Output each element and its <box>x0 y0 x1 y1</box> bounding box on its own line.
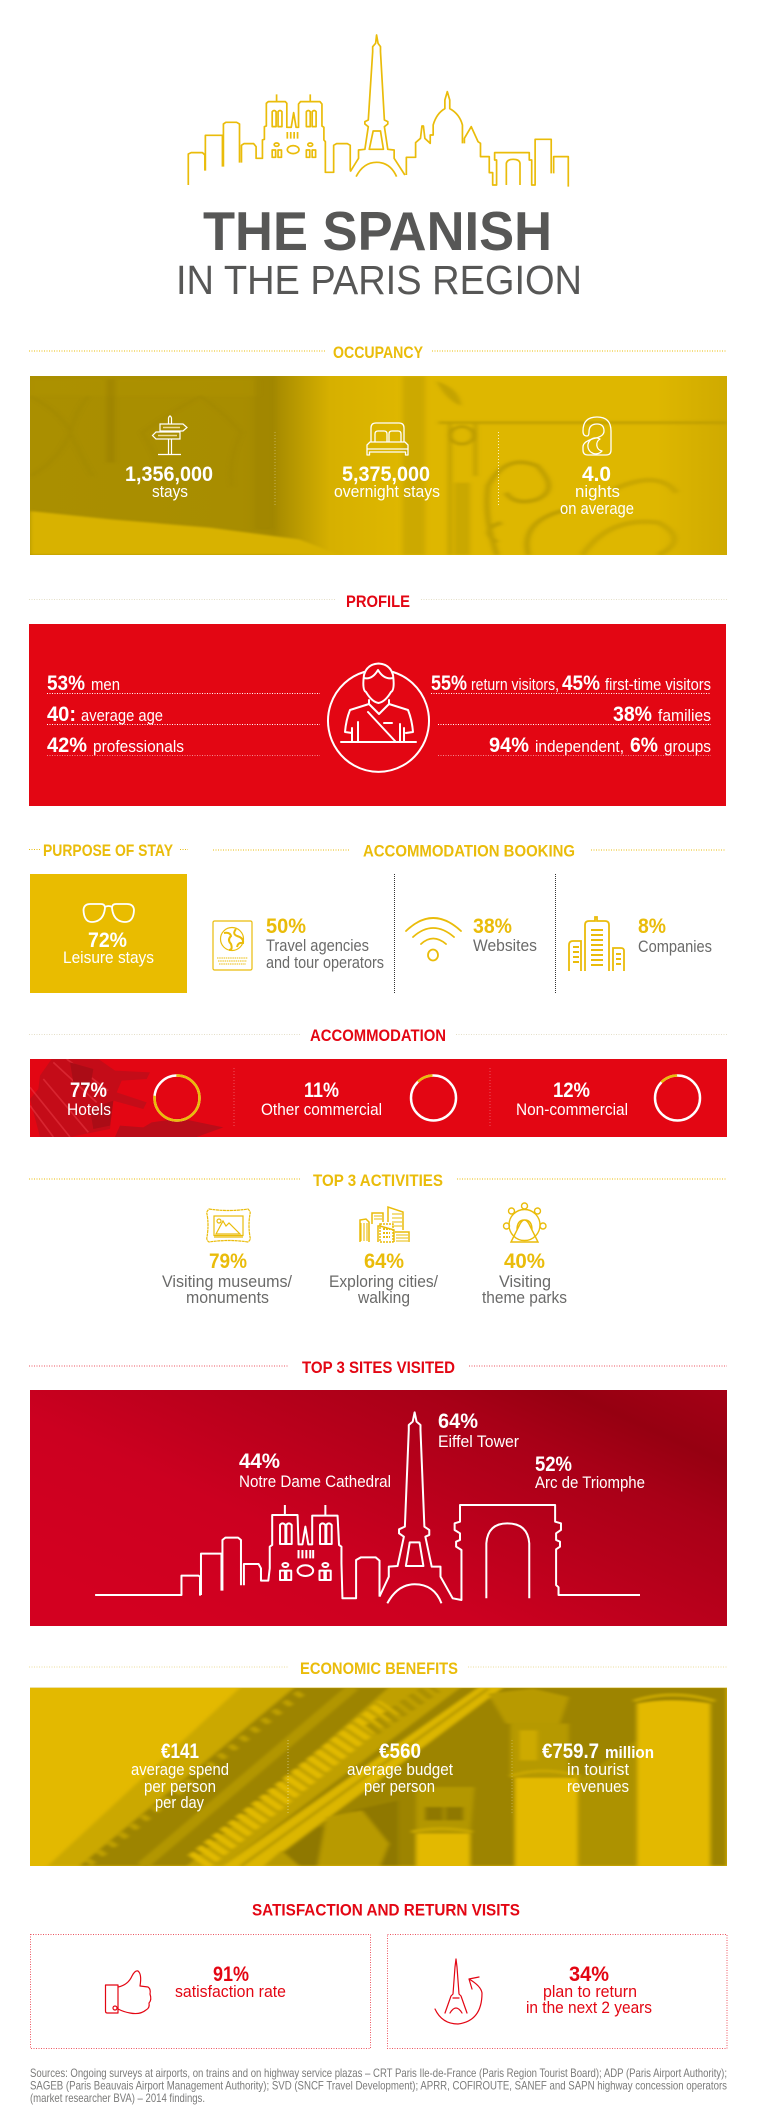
icon: framed picture <box>207 1209 250 1242</box>
stat: average spend: average spend <box>131 1760 229 1779</box>
profile stats right: 45% <box>562 672 600 695</box>
profile stats right: first-time visitors <box>605 675 711 694</box>
profile stats left: professionals <box>93 737 184 756</box>
title: IN THE PARIS REGION <box>176 257 582 303</box>
label: Notre Dame Cathedral <box>239 1450 391 1491</box>
stat: average spend: €141 <box>161 1740 199 1763</box>
stat: nights on average: nights <box>575 482 620 501</box>
profile stats right: 38% <box>613 703 652 726</box>
stat: return visits: plan to return <box>543 1982 637 2001</box>
accommodation background map <box>30 1059 223 1137</box>
activity: exploring cities: 64% <box>364 1250 404 1273</box>
stat: satisfaction rate: satisfaction rate <box>175 1982 286 2001</box>
stat: average budget: average budget <box>347 1760 453 1779</box>
label: Arc de Triomphe: 52% <box>535 1453 572 1476</box>
stat: average spend: per day <box>155 1793 204 1812</box>
heading: economic benefits: ECONOMIC BENEFITS <box>300 1659 458 1678</box>
heading: occupancy: OCCUPANCY <box>333 343 424 362</box>
label: Notre Dame Cathedral: 44% <box>239 1450 280 1473</box>
profile stats left: 40: <box>47 703 76 726</box>
icon: wifi <box>406 918 461 960</box>
stat: leisure stays <box>63 929 154 967</box>
stat: return visits: in the next 2 years <box>526 1998 652 2017</box>
icon: passport <box>213 921 252 970</box>
label: Eiffel Tower: 64% <box>438 1410 478 1433</box>
stat: overnight stays: 5,375,000 <box>342 463 430 486</box>
stat: average spend: per person <box>144 1777 216 1796</box>
activity: theme parks: 40% <box>504 1250 545 1273</box>
icon: door hanger <box>583 417 611 455</box>
stat: travel agencies <box>266 915 384 972</box>
stat: hotels <box>67 1079 111 1119</box>
stat: satisfaction rate <box>175 1963 286 2001</box>
stat: companies <box>638 915 712 956</box>
stat: companies: 8% <box>638 915 666 938</box>
sources footnote: (market researcher BVA) – 2014 findings. <box>30 2091 205 2105</box>
activity: exploring cities: walking <box>357 1288 410 1307</box>
label: Arc de Triomphe: Arc de Triomphe <box>535 1473 645 1492</box>
profile stats left: 42% <box>47 734 87 757</box>
ring: non-commercial 12% <box>646 1066 709 1130</box>
stat: nights on average: 4.0 <box>582 463 611 486</box>
stat: websites <box>473 915 537 955</box>
label: Notre Dame Cathedral: Notre Dame Cathedral <box>239 1472 391 1491</box>
stat: hotels: 77% <box>70 1079 107 1102</box>
stat: hotels: Hotels <box>67 1100 111 1119</box>
profile stats left: average age <box>81 706 163 725</box>
stat: tourist revenues: in tourist <box>567 1760 629 1779</box>
profile stats right: return visitors, <box>471 675 559 694</box>
stat: companies: Companies <box>638 937 712 956</box>
profile stats right: groups <box>664 737 711 756</box>
activity: museums <box>162 1250 292 1307</box>
occupancy background photo <box>30 376 727 555</box>
icon: glasses <box>84 904 134 922</box>
activity: theme parks: theme parks <box>482 1288 567 1307</box>
icon: signpost <box>152 416 187 454</box>
stat: travel agencies: and tour operators <box>266 953 384 972</box>
profile stats left: 53% <box>47 672 85 695</box>
panel: top 3 sites <box>30 1390 727 1626</box>
stat: tourist revenues <box>542 1740 654 1796</box>
stat: average spend <box>131 1740 229 1812</box>
activity: theme parks: Visiting <box>499 1272 551 1291</box>
stat: stays: 1,356,000 <box>125 463 213 486</box>
profile stats left: men <box>91 675 120 694</box>
stat: travel agencies: Travel agencies <box>266 936 369 955</box>
stat: websites: Websites <box>473 936 537 955</box>
panel: satisfaction <box>30 1934 370 2048</box>
icon: city buildings <box>360 1207 409 1242</box>
activity: museums: 79% <box>209 1250 247 1273</box>
icon: thumbs up <box>106 1971 151 2014</box>
stat: nights on average: on average <box>560 499 634 518</box>
panel: profile <box>29 624 726 806</box>
stat: average budget: per person <box>364 1777 435 1796</box>
ring: hotels 77% <box>154 1076 200 1120</box>
ring: other commercial 11% <box>402 1066 465 1130</box>
label: Eiffel Tower <box>438 1410 519 1451</box>
stat: non-commercial: 12% <box>553 1079 590 1102</box>
title skyline illustration <box>188 35 568 187</box>
activity: museums: monuments <box>186 1288 269 1307</box>
icon: bed <box>367 423 408 455</box>
activity: museums: Visiting museums/ <box>162 1272 292 1291</box>
panel: accommodation <box>30 1059 727 1137</box>
title <box>176 200 582 303</box>
stat: return visits <box>526 1963 652 2017</box>
stat: satisfaction rate: 91% <box>213 1963 249 1986</box>
stat: leisure stays: Leisure stays <box>63 948 154 967</box>
heading: accommodation booking: ACCOMMODATION BOOKING <box>363 842 575 860</box>
profile stats right <box>431 672 711 757</box>
stat: stays <box>125 463 213 501</box>
stat: tourist revenues: revenues <box>567 1777 629 1796</box>
stat: overnight stays: overnight stays <box>334 482 440 501</box>
stat: return visits: 34% <box>569 1963 609 1986</box>
icon: tourist portrait <box>328 664 429 772</box>
activity: exploring cities <box>329 1250 438 1307</box>
economic background photo <box>30 1687 727 1866</box>
heading: satisfaction and return visits: SATISFACTION AND RETURN VISITS <box>252 1900 520 1920</box>
stat: non-commercial <box>516 1079 628 1119</box>
stat: leisure stays: 72% <box>88 929 127 952</box>
activity: theme parks <box>482 1250 567 1307</box>
sources footnote <box>30 2066 727 2105</box>
stat: overnight stays <box>334 463 440 501</box>
panel: return visits <box>388 1934 727 2048</box>
stat: other commercial: 11% <box>304 1079 339 1102</box>
profile stats left <box>47 672 320 757</box>
stat: average budget <box>347 1740 453 1796</box>
stat: stays: stays <box>152 482 188 501</box>
heading: profile: PROFILE <box>346 592 410 611</box>
stat: non-commercial: Non-commercial <box>516 1100 628 1119</box>
heading: top 3 sites visited: TOP 3 SITES VISITED <box>302 1358 455 1377</box>
label: Eiffel Tower: Eiffel Tower <box>438 1432 519 1451</box>
panel: leisure stays <box>30 874 187 993</box>
panel: economic benefits <box>30 1687 727 1866</box>
stat: nights on average <box>560 463 634 518</box>
stat: websites: 38% <box>473 915 512 938</box>
profile stats right: 6% <box>630 734 658 757</box>
profile stats right: 94% <box>489 734 529 757</box>
stat: tourist revenues: €759.7 <box>542 1740 599 1763</box>
white skyline illustration <box>95 1412 640 1603</box>
stat: other commercial: Other commercial <box>261 1100 382 1119</box>
title: THE SPANISH <box>203 200 552 262</box>
icon: Eiffel Tower with return arrow <box>435 1959 482 2024</box>
icon: ferris wheel <box>504 1203 546 1242</box>
profile stats right: 55% <box>431 672 467 695</box>
profile stats right: independent, <box>535 737 624 756</box>
stat: travel agencies: 50% <box>266 915 306 938</box>
activity: exploring cities: Exploring cities/ <box>329 1272 438 1291</box>
stat: average budget: €560 <box>379 1740 421 1763</box>
stat: tourist revenues: million <box>605 1743 654 1762</box>
heading: accommodation: ACCOMMODATION <box>310 1026 446 1045</box>
heading: top 3 activities: TOP 3 ACTIVITIES <box>313 1171 443 1190</box>
label: Arc de Triomphe <box>535 1453 645 1492</box>
heading: purpose of stay: PURPOSE OF STAY <box>43 841 174 860</box>
stat: other commercial <box>261 1079 382 1119</box>
icon: office buildings <box>569 917 624 971</box>
profile stats right: families <box>658 706 711 725</box>
panel: occupancy <box>30 376 727 555</box>
